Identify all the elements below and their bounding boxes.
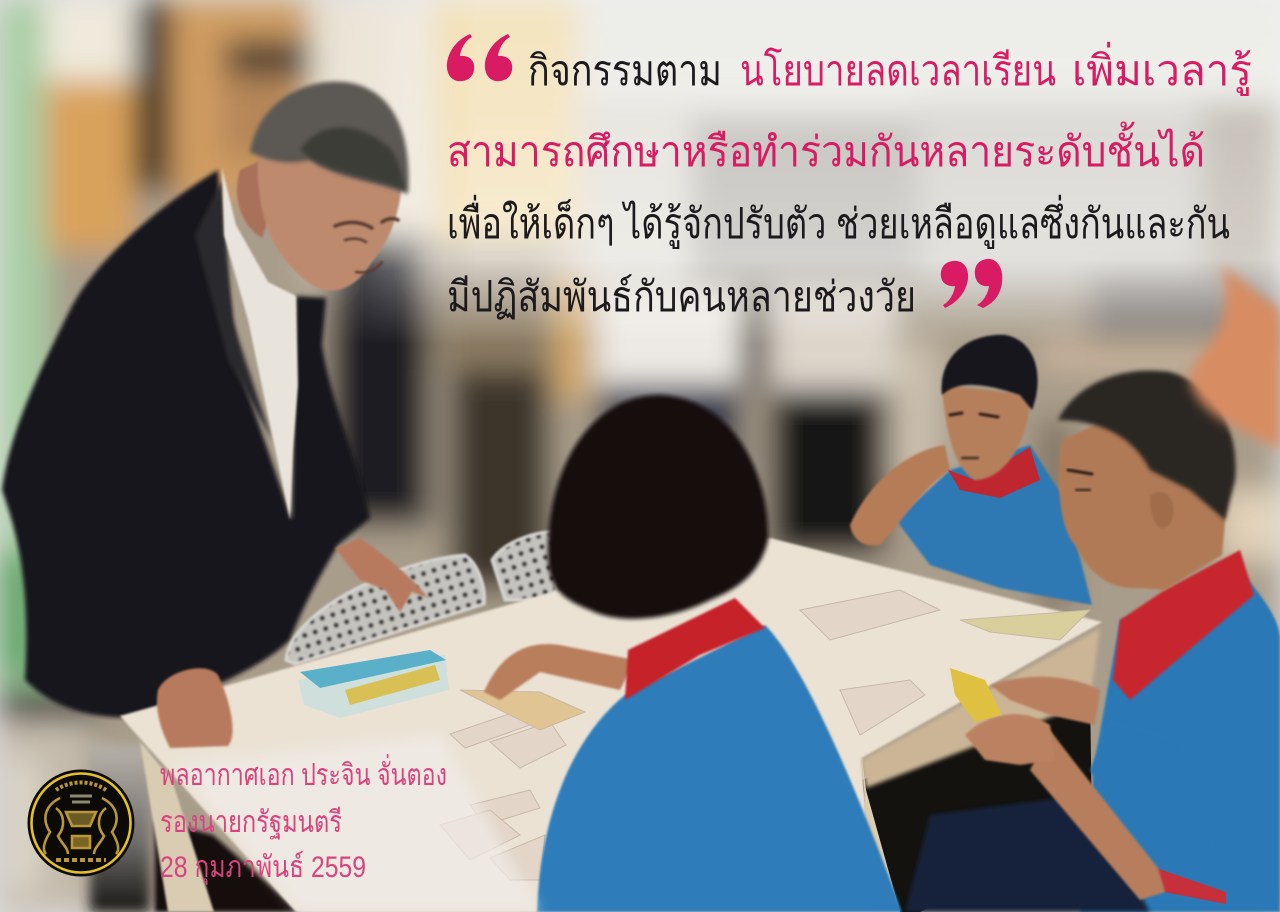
blurred hand at right edge	[1190, 265, 1280, 450]
shirt	[222, 168, 298, 520]
red collar	[625, 598, 765, 700]
facial features	[1068, 470, 1092, 490]
face and neck	[1059, 400, 1230, 590]
quote block: นโยบายลดเวลาเรียน	[740, 46, 1056, 94]
face	[942, 385, 1030, 480]
hair	[942, 335, 1038, 410]
sleeve	[1090, 720, 1230, 900]
quote line 1: กิจกรรมตาม	[528, 47, 722, 94]
position: รองนายกรัฐมนตรี	[160, 806, 342, 840]
name: พลอากาศเอก ประจิน จั่นตอง	[160, 754, 447, 792]
quote line 4: มีปฏิสัมพันธ์กับคนหลายช่วงวัย	[447, 273, 916, 320]
forearm	[1030, 730, 1165, 900]
held card	[950, 668, 1002, 722]
opening quote mark	[447, 34, 512, 81]
right hand	[335, 538, 428, 612]
facial features	[950, 413, 998, 458]
hair	[250, 82, 408, 194]
red collar	[1113, 550, 1254, 700]
government seal	[28, 770, 134, 876]
arm	[484, 644, 635, 700]
dark trousers	[905, 795, 1150, 912]
arm	[850, 445, 950, 546]
person: man in dark suit	[2, 82, 408, 717]
person: girl from behind	[484, 395, 902, 912]
white veil behind the quote	[300, 0, 1280, 345]
seal emblem	[44, 782, 118, 860]
facial features	[335, 219, 398, 273]
red collar	[948, 447, 1040, 498]
blue shirt	[896, 445, 1092, 605]
domino cards	[440, 590, 1090, 880]
left hand	[157, 668, 233, 748]
game box	[298, 650, 449, 718]
person: boy at right	[905, 371, 1280, 912]
date: 28 กุมภาพันธ์ 2559	[160, 850, 366, 886]
chairs	[286, 532, 558, 664]
lower hand	[965, 714, 1055, 765]
cuff stripe	[1156, 868, 1226, 904]
face	[258, 130, 402, 290]
hair	[548, 395, 768, 619]
table	[120, 538, 1102, 912]
light fade behind credit	[175, 735, 540, 912]
credit block	[160, 754, 447, 886]
jacket	[2, 170, 370, 717]
upper hand and arm	[990, 677, 1100, 725]
area under table at lower left	[90, 742, 300, 912]
quote block	[447, 34, 1252, 320]
quote block: เพิ่มเวลารู้	[1072, 42, 1252, 96]
lapel highlight	[195, 180, 272, 440]
blue shirt	[1080, 570, 1280, 912]
ear	[1150, 492, 1173, 528]
quote line 2: สามารถศึกษาหรือทำร่วมกันหลายระดับชั้นได้	[447, 121, 1205, 175]
man's hands	[157, 538, 428, 748]
person: boy in middle	[850, 335, 1092, 605]
hair	[1058, 371, 1236, 520]
closing quote mark	[941, 259, 1002, 308]
ear	[237, 160, 275, 238]
blue shirt	[537, 625, 902, 912]
